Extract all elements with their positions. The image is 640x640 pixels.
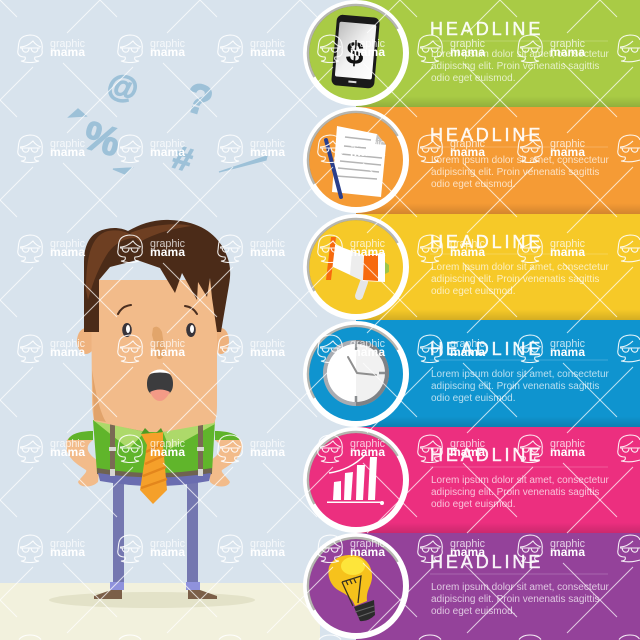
icon: megaphone (326, 237, 389, 296)
text block 6: odio eget euismod. (431, 606, 516, 617)
text block 5: Lorem ipsum dolor sit amet, consectetur (431, 475, 610, 486)
text block 4: Lorem ipsum dolor sit amet, consectetur (431, 369, 610, 380)
shadow (49, 592, 255, 608)
text block 5: HEADLINE (430, 445, 543, 465)
circle: purple bulb (290, 520, 406, 636)
text block 3 (430, 232, 610, 297)
mouth (147, 372, 173, 396)
text block 6: HEADLINE (430, 552, 543, 572)
panel: orange (356, 107, 640, 214)
floating symbols: @ (104, 66, 142, 107)
floating symbols: # (169, 138, 197, 179)
floating symbols: % (79, 113, 125, 165)
text block 2: odio eget euismod. (431, 179, 516, 190)
text block 1 (430, 19, 610, 84)
hair (84, 220, 230, 332)
text block 5: adipiscing elit. Proin venenatis sagittis (431, 487, 599, 498)
nose (152, 327, 165, 359)
text block 4: adipiscing elit. Proin venenatis sagittis (431, 381, 599, 392)
text block 3: HEADLINE (430, 232, 543, 252)
icon: clock (323, 340, 389, 406)
panel: purple (356, 533, 640, 640)
text block 1: odio eget euismod. (431, 73, 516, 84)
circle: blue clock (290, 308, 406, 424)
circle: orange document (290, 94, 406, 210)
text block 1: Lorem ipsum dolor sit amet, consectetur (431, 49, 610, 60)
text block 6: Lorem ipsum dolor sit amet, consectetur (431, 582, 610, 593)
icon: phone: $ (344, 34, 366, 72)
character (49, 220, 255, 608)
text block 5 (430, 445, 610, 510)
icon: document and pen (326, 126, 386, 197)
text block 6 (430, 552, 610, 617)
ground (0, 583, 320, 640)
circle: pink chart (290, 414, 406, 530)
text block 6: adipiscing elit. Proin venenatis sagittis (431, 594, 599, 605)
panel: blue (356, 320, 640, 427)
text block 1: HEADLINE (430, 19, 543, 39)
legs (94, 480, 217, 599)
floating symbols: ? (180, 73, 218, 125)
text block 4: odio eget euismod. (431, 393, 516, 404)
head (84, 220, 230, 432)
text block 2: Lorem ipsum dolor sit amet, consectetur (431, 155, 610, 166)
text block 3: Lorem ipsum dolor sit amet, consectetur (431, 262, 610, 273)
text block 4 (430, 339, 610, 404)
panel: yellow (356, 214, 640, 320)
tie (140, 428, 167, 504)
text block 2: HEADLINE (430, 125, 543, 145)
icon: bar chart (327, 455, 384, 505)
text block 1: adipiscing elit. Proin venenatis sagittis (431, 61, 599, 72)
panel: green (356, 0, 640, 107)
text block 2 (430, 125, 610, 190)
panel: pink (356, 427, 640, 533)
floating symbols (69, 66, 267, 179)
arms (66, 431, 242, 486)
circle: yellow megaphone (290, 201, 406, 317)
text block 2: adipiscing elit. Proin venenatis sagittis (431, 167, 599, 178)
brows (118, 305, 197, 314)
text block 3: adipiscing elit. Proin venenatis sagittis (431, 274, 599, 285)
icon: light bulb (328, 555, 375, 621)
text block 3: odio eget euismod. (431, 286, 516, 297)
eyes (122, 323, 132, 337)
ears (77, 328, 95, 354)
text block 5: odio eget euismod. (431, 499, 516, 510)
text block 4: HEADLINE (430, 339, 543, 359)
circle: green phone (290, 0, 406, 103)
torso (93, 420, 215, 486)
